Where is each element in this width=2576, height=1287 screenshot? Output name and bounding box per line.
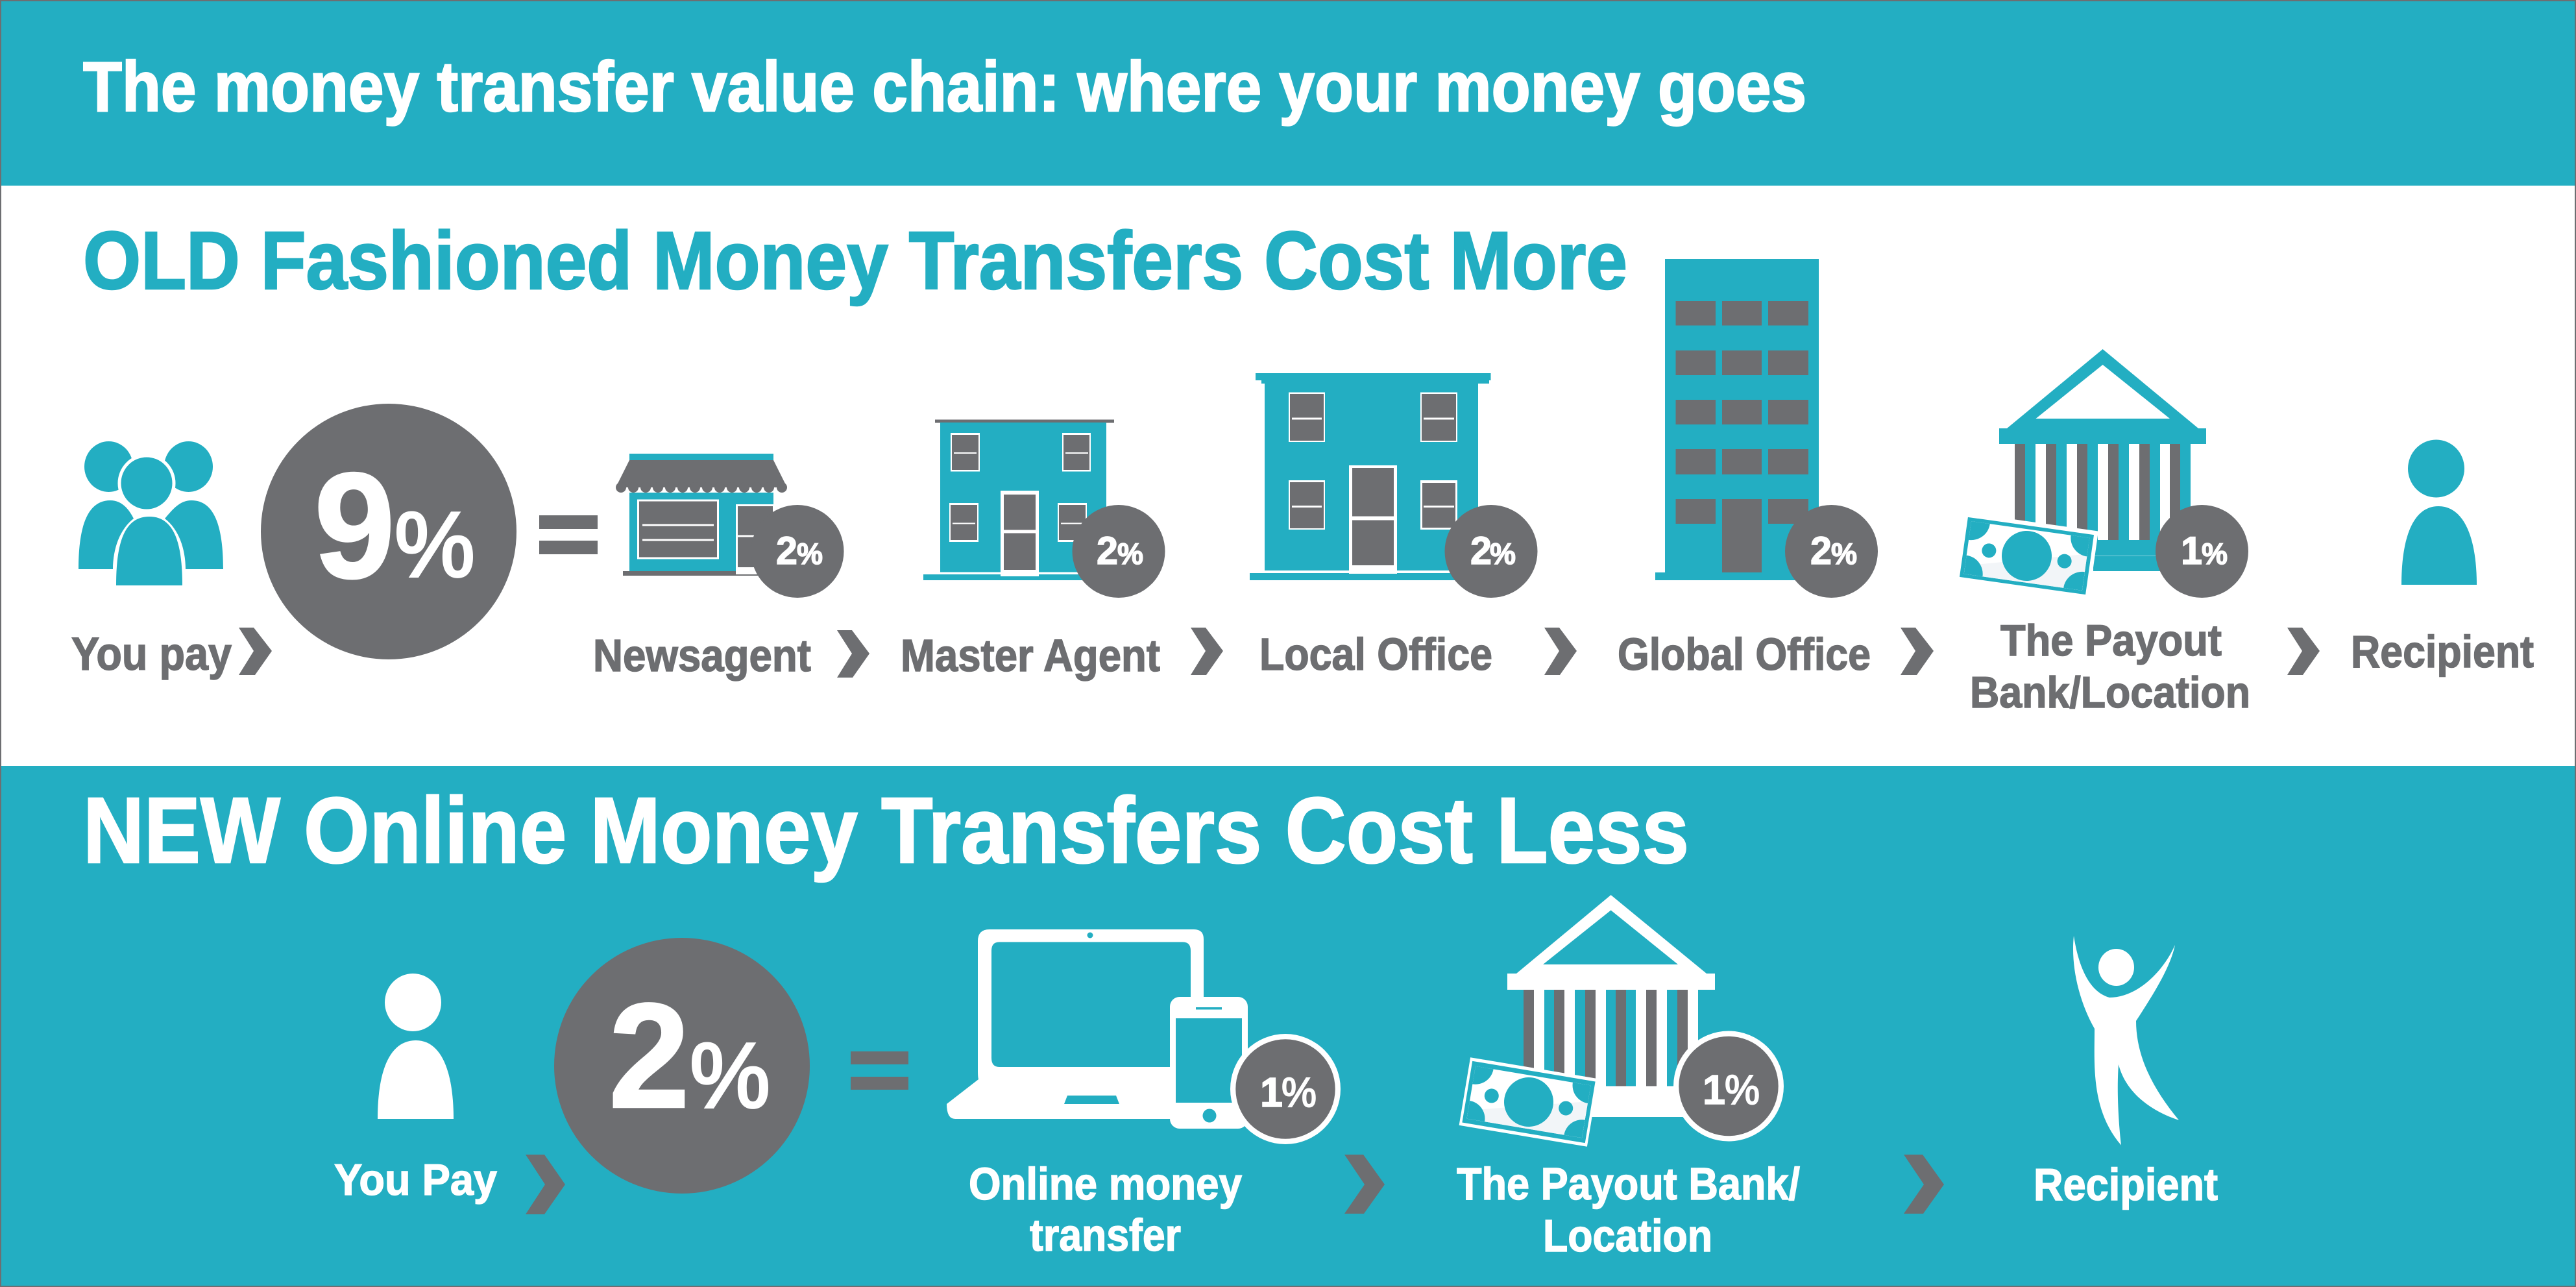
equals sign xyxy=(851,1051,908,1090)
label: the payout bank/location: Location xyxy=(1543,1210,1712,1261)
icon: payout bank xyxy=(1507,895,1715,1117)
badge: online transfer 1%: % xyxy=(1282,1069,1317,1116)
arrow: you pay xyxy=(526,1155,565,1214)
total cost circle: 9%: 9 xyxy=(314,442,395,610)
badge: payout bank 1%: % xyxy=(2202,537,2228,570)
title: The money transfer value chain: where your money goes xyxy=(83,47,1806,127)
label: the payout bank/location xyxy=(1457,1158,1800,1261)
arrow: global office xyxy=(1901,628,1934,675)
total cost circle: 9% xyxy=(261,404,516,659)
label: online money transfer: transfer xyxy=(1030,1210,1181,1260)
label: recipient: Recipient xyxy=(2351,626,2534,677)
label: the payout bank/location: The Payout Bank/ xyxy=(1457,1158,1800,1209)
total cost circle: 2% xyxy=(554,938,810,1194)
badge: master agent 2%: % xyxy=(1117,537,1143,570)
badge: newsagent 2% xyxy=(751,505,844,598)
panel: header band xyxy=(0,0,2576,186)
label: recipient: Recipient xyxy=(2034,1159,2218,1210)
heading: new online: NEW Online Money Transfers Cost Less xyxy=(83,778,1689,883)
arrow: local office xyxy=(1544,628,1577,675)
arrow: master agent xyxy=(1191,628,1223,675)
icon: master agent house xyxy=(923,419,1114,580)
label: online money transfer xyxy=(969,1158,1242,1260)
label: global office: Global Office xyxy=(1618,629,1871,680)
badge: payout bank 1% xyxy=(2156,505,2248,598)
badge: local office 2%: % xyxy=(1490,537,1516,570)
label: you pay: You Pay xyxy=(334,1155,497,1205)
badge: payout bank 1% xyxy=(1673,1031,1784,1141)
arrow: you pay xyxy=(239,628,272,675)
label: online money transfer: Online money xyxy=(969,1158,1242,1209)
badge: global office 2%: 2 xyxy=(1810,529,1832,572)
arrow: online transfer xyxy=(1344,1155,1385,1214)
badge: newsagent 2%: 2 xyxy=(776,529,797,572)
icon: jumping recipient xyxy=(2073,936,2179,1145)
arrow: payout bank xyxy=(1904,1155,1944,1214)
label: newsagent: Newsagent xyxy=(593,630,811,681)
badge: master agent 2% xyxy=(1072,505,1165,598)
label: master agent: Master Agent xyxy=(901,630,1160,681)
label: the payout bank/location: The Payout xyxy=(2000,616,2222,665)
badge: local office 2% xyxy=(1444,505,1538,598)
label: local office: Local Office xyxy=(1259,629,1492,680)
panel: old fashioned transfers xyxy=(71,215,2534,717)
badge: payout bank 1%: 1 xyxy=(1703,1066,1725,1113)
arrow: newsagent xyxy=(837,630,869,678)
badge: local office 2%: 2 xyxy=(1470,529,1492,572)
icon: recipient person xyxy=(2401,440,2477,585)
badge: global office 2% xyxy=(1785,505,1878,598)
arrow: payout bank xyxy=(2287,628,2320,675)
label: the payout bank/location xyxy=(1970,616,2250,717)
badge: payout bank 1%: 1 xyxy=(2181,529,2202,572)
total cost circle: 2%: % xyxy=(690,1024,770,1127)
equals sign xyxy=(539,515,598,554)
total cost circle: 2%: 2 xyxy=(609,972,690,1139)
heading: old fashioned: OLD Fashioned Money Transfers Cost More xyxy=(83,215,1627,306)
icon: newsagent shop xyxy=(616,454,787,576)
icon: group of people xyxy=(79,441,223,585)
badge: master agent 2%: 2 xyxy=(1097,529,1118,572)
label: you pay: You pay xyxy=(71,629,232,680)
icon: person paying xyxy=(378,974,454,1119)
badge: global office 2%: % xyxy=(1831,537,1857,570)
icon: payout bank xyxy=(1999,349,2206,571)
badge: newsagent 2%: % xyxy=(797,537,823,570)
icon: laptop and phone xyxy=(947,929,1248,1129)
total cost circle: 9%: % xyxy=(395,493,475,596)
panel: new online transfers xyxy=(0,766,2576,1287)
icon: banknote xyxy=(1459,1057,1596,1147)
icon: local office xyxy=(1250,373,1491,580)
icon: banknote xyxy=(1960,517,2098,594)
badge: online transfer 1%: 1 xyxy=(1260,1069,1283,1116)
icon: global office tower xyxy=(1655,259,1819,580)
label: the payout bank/location: Bank/Location xyxy=(1970,668,2250,717)
badge: payout bank 1%: % xyxy=(1725,1066,1760,1113)
badge: online transfer 1% xyxy=(1230,1034,1341,1144)
